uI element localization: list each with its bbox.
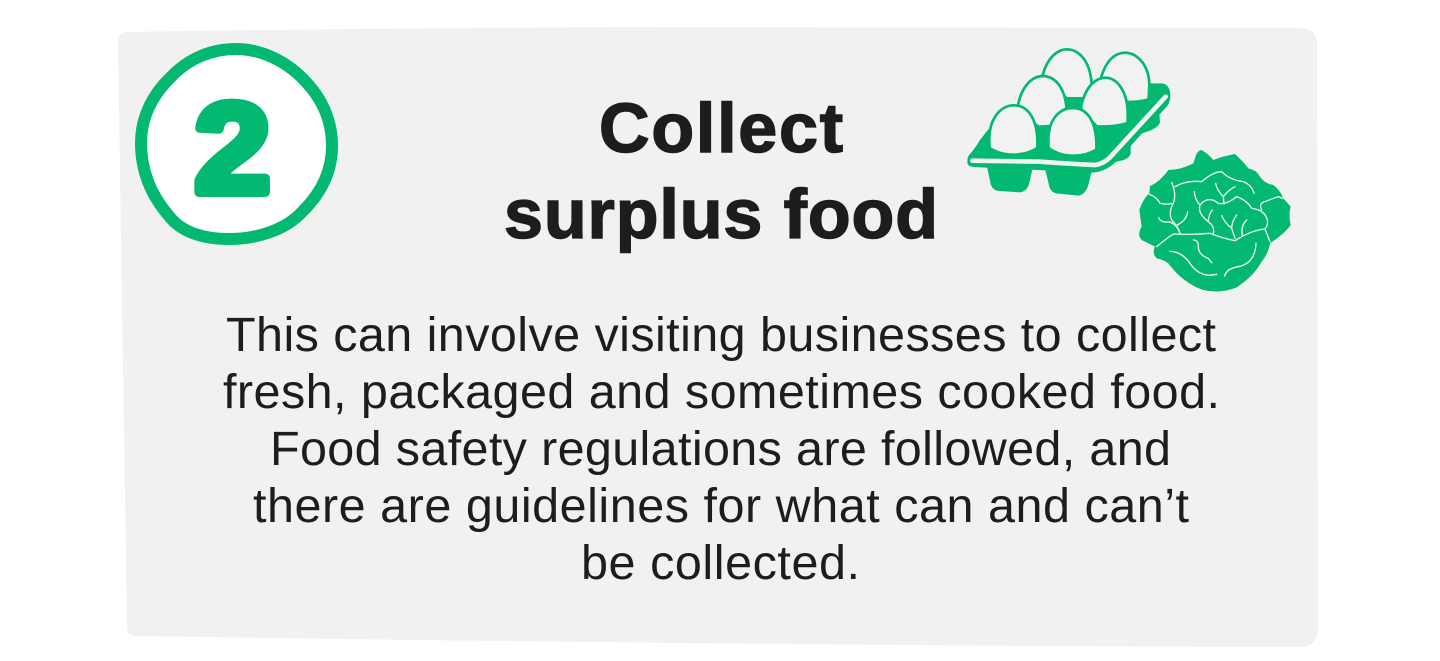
egg middle left <box>1018 76 1067 127</box>
icon: step number badge <box>141 49 332 239</box>
heading line 2: surplus food <box>504 175 938 253</box>
step number: 2 <box>194 78 271 221</box>
egg back right <box>1101 53 1149 102</box>
icon: lettuce <box>1139 150 1291 291</box>
body line 5: be collected. <box>581 536 860 590</box>
panel: step background <box>118 27 1318 647</box>
heading line 1: Collect <box>599 89 843 167</box>
outer leaf veins <box>1157 229 1270 247</box>
lettuce veins <box>1149 172 1283 276</box>
lettuce leaves <box>1139 150 1291 291</box>
icon: egg tray <box>967 49 1170 196</box>
tray rim highlight <box>972 97 1166 165</box>
body line 1: This can involve visiting businesses to collect <box>226 308 1217 362</box>
badge ring <box>141 49 332 239</box>
body line 3: Food safety regulations are followed, and <box>270 422 1171 476</box>
egg back left <box>1043 49 1092 98</box>
eggs <box>989 49 1149 156</box>
body text <box>223 308 1220 590</box>
egg front left <box>989 105 1037 155</box>
tray cups <box>987 113 1160 196</box>
egg middle right <box>1081 78 1128 127</box>
egg front right <box>1048 108 1096 156</box>
body line 4: there are guidelines for what can and can’t <box>253 479 1190 533</box>
tray base <box>967 83 1170 173</box>
body line 2: fresh, packaged and sometimes cooked food. <box>223 365 1220 419</box>
heading <box>504 89 938 253</box>
